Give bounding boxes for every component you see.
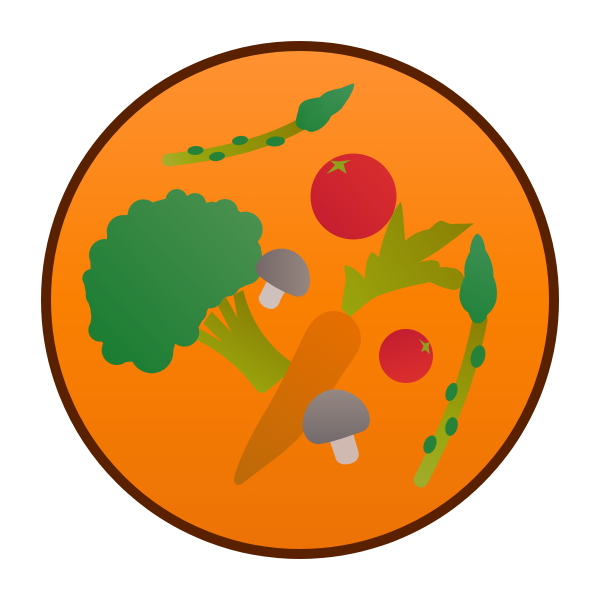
tomato small <box>379 329 433 383</box>
asparagus tip <box>459 233 497 323</box>
large mushroom <box>303 389 370 464</box>
asparagus tip <box>296 83 354 136</box>
carrot <box>234 311 361 485</box>
small mushroom <box>256 249 310 309</box>
asparagus stalk <box>168 124 302 160</box>
top asparagus <box>168 83 354 162</box>
background circle <box>46 46 554 554</box>
small tomato calyx <box>419 339 430 354</box>
celery leaf carrot top <box>341 202 474 317</box>
broccoli <box>82 189 297 393</box>
tomato large <box>310 154 396 240</box>
broccoli crown <box>82 189 263 373</box>
asparagus scales <box>421 344 488 456</box>
right asparagus <box>421 233 497 480</box>
mushroom cap <box>303 389 370 444</box>
mushroom stem <box>330 434 359 464</box>
asparagus stalk <box>421 320 480 480</box>
asparagus scales <box>187 135 285 162</box>
mushroom stem <box>259 282 285 309</box>
tomato calyx <box>326 160 351 174</box>
mushroom cap <box>256 249 310 297</box>
broccoli stem <box>196 290 297 393</box>
